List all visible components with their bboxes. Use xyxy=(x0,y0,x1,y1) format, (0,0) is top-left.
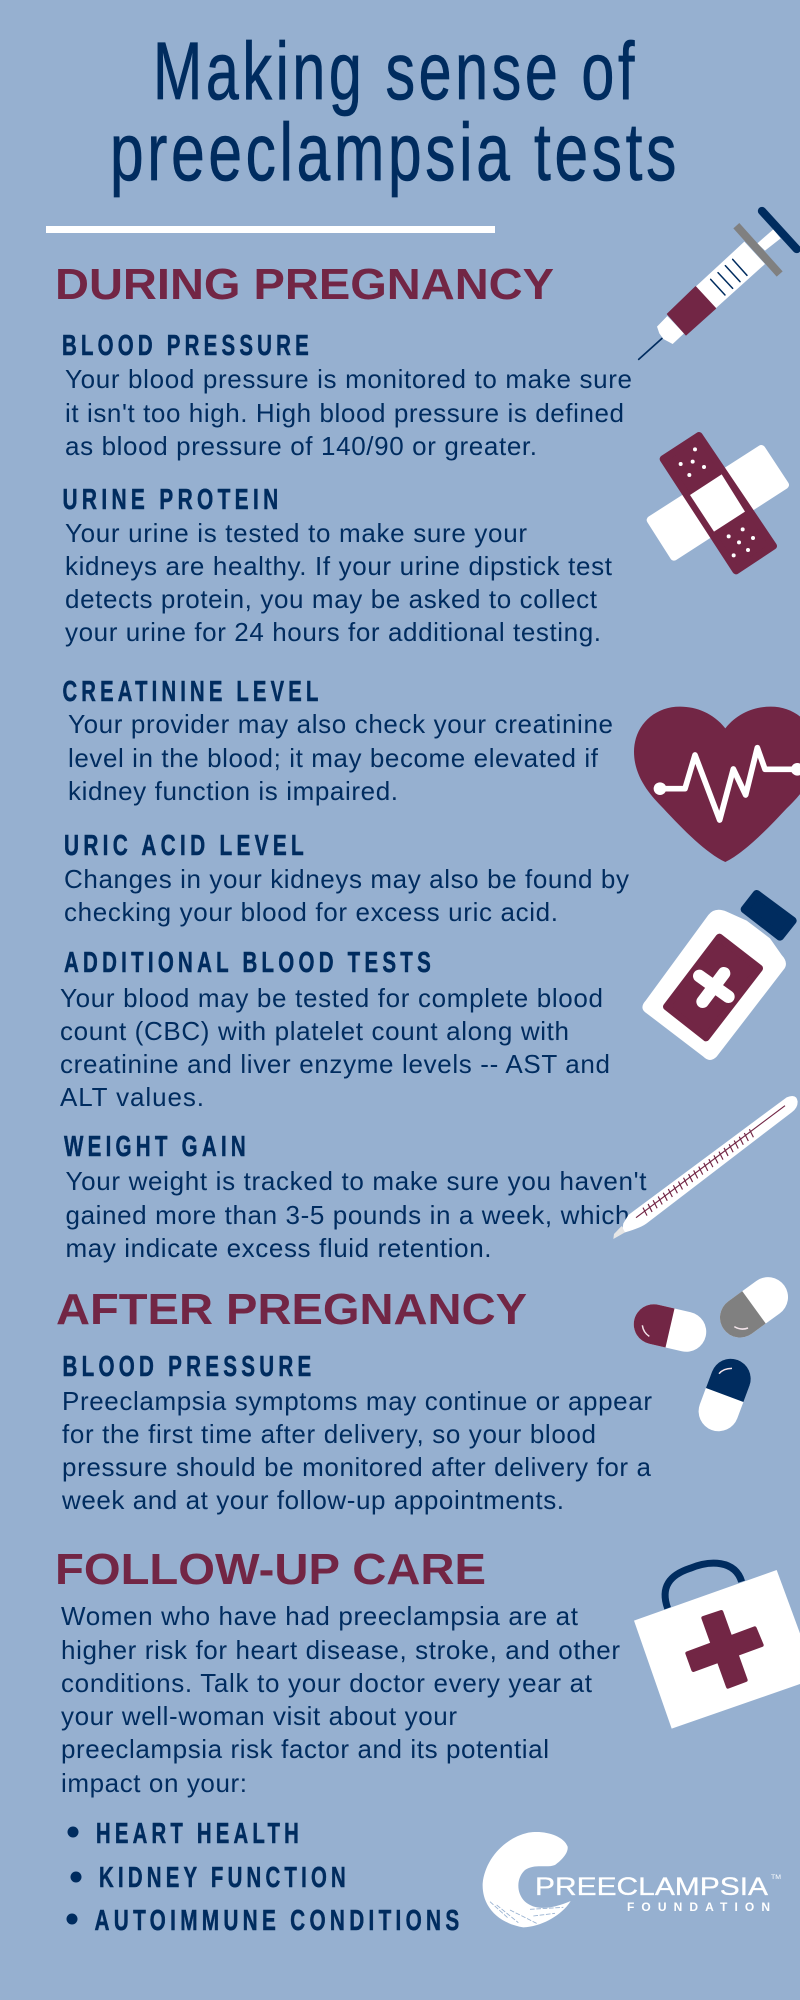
icon: heart with pulse xyxy=(634,707,800,862)
icon: maroon pill xyxy=(630,1300,710,1356)
logo: Preeclampsia Foundation: PREECLAMPSIA xyxy=(535,1873,768,1901)
icon: medicine bottle xyxy=(642,894,793,1060)
logo mark: brush stroke C xyxy=(483,1832,571,1927)
text block: follow-up care: preeclampsia risk factor and its potential xyxy=(61,1734,549,1764)
heading: follow-up care: FOLLOW-UP CARE xyxy=(55,1545,486,1594)
text block: weight gain: gained more than 3-5 pounds in a week, which xyxy=(66,1200,630,1230)
logo: Preeclampsia Foundation: FOUNDATION xyxy=(627,1900,770,1914)
text block: after pregnancy blood pressure: Preeclampsia symptoms may continue or appear xyxy=(62,1386,652,1416)
text block: follow-up care: higher risk for heart disease, stroke, and other xyxy=(61,1635,620,1665)
panel: after pregnancy blood pressure xyxy=(61,1351,652,1515)
text block: weight gain: Your weight is tracked to make sure you haven't xyxy=(66,1166,647,1196)
bullet list xyxy=(66,1818,464,1937)
text block: blood pressure xyxy=(65,364,632,461)
bullet list: KIDNEY FUNCTION xyxy=(99,1862,350,1894)
text block: follow-up care: Women who have had preeclampsia are at xyxy=(61,1601,579,1631)
text block: creatinine level xyxy=(68,709,613,806)
text block: additional blood tests: count (CBC) with platelet count along with xyxy=(60,1016,569,1046)
text block: urine protein: detects protein, you may be asked to collect xyxy=(65,584,598,614)
heading: during pregnancy: DURING PREGNANCY xyxy=(55,260,554,309)
icon: thermometer xyxy=(613,1096,798,1239)
subheading: creatinine level: CREATININE LEVEL xyxy=(62,676,322,708)
logo: Preeclampsia Foundation xyxy=(483,1832,781,1927)
text block: uric acid level: Changes in your kidneys may also be found by xyxy=(64,864,629,894)
text block: blood pressure: Your blood pressure is monitored to make sure xyxy=(65,364,632,394)
subheading: urine protein: URINE PROTEIN xyxy=(62,484,282,516)
title xyxy=(110,26,680,198)
subheading: after pregnancy blood pressure: BLOOD PRESSURE xyxy=(62,1351,316,1383)
bullet list: AUTOIMMUNE CONDITIONS xyxy=(94,1905,464,1937)
text block: urine protein: kidneys are healthy. If your urine dipstick test xyxy=(65,551,613,581)
text block: uric acid level xyxy=(64,864,629,927)
text block: urine protein xyxy=(65,518,613,647)
text block: creatinine level: level in the blood; it may become elevated if xyxy=(68,743,599,773)
text block: weight gain xyxy=(66,1166,647,1263)
text block: follow-up care: conditions. Talk to your doctor every year at xyxy=(61,1668,593,1698)
text block: after pregnancy blood pressure: week and at your follow-up appointments. xyxy=(61,1485,564,1515)
icon: gray pill xyxy=(712,1269,796,1345)
subheading: uric acid level: URIC ACID LEVEL xyxy=(64,830,308,862)
panel: uric acid level xyxy=(64,830,629,927)
text block: weight gain: may indicate excess fluid retention. xyxy=(66,1233,492,1263)
icon: medical kit xyxy=(634,1563,800,1729)
text block: urine protein: your urine for 24 hours for additional testing. xyxy=(65,617,601,647)
text block: follow-up care: your well-woman visit about your xyxy=(61,1701,457,1731)
icon: syringe xyxy=(639,211,797,359)
logo: Preeclampsia Foundation: TM xyxy=(771,1875,781,1881)
text block: after pregnancy blood pressure xyxy=(61,1386,652,1515)
panel: additional blood tests xyxy=(60,947,610,1112)
text block: additional blood tests xyxy=(60,983,610,1112)
heading: after pregnancy: AFTER PREGNANCY xyxy=(56,1285,527,1334)
subheading: blood pressure: BLOOD PRESSURE xyxy=(62,330,313,362)
text block: additional blood tests: creatinine and liver enzyme levels -- AST and xyxy=(60,1049,610,1079)
text block: blood pressure: as blood pressure of 140/90 or greater. xyxy=(65,431,537,461)
text block: uric acid level: checking your blood for excess uric acid. xyxy=(64,897,558,927)
icon: navy pill xyxy=(693,1353,756,1437)
text block: after pregnancy blood pressure: pressure should be monitored after delivery for a xyxy=(62,1452,652,1482)
icon: bandage xyxy=(651,436,785,571)
text block: additional blood tests: Your blood may be tested for complete blood xyxy=(60,983,603,1013)
subheading: additional blood tests: ADDITIONAL BLOOD TESTS xyxy=(64,947,435,979)
text block: creatinine level: Your provider may also check your creatinine xyxy=(68,709,613,739)
text block: urine protein: Your urine is tested to make sure your xyxy=(65,518,527,548)
panel: creatinine level xyxy=(62,676,613,806)
text block: additional blood tests: ALT values. xyxy=(60,1082,204,1112)
text block: after pregnancy blood pressure: for the first time after delivery, so your blood xyxy=(62,1419,596,1449)
text block: blood pressure: it isn't too high. High blood pressure is defined xyxy=(65,398,624,428)
text block: follow-up care: impact on your: xyxy=(61,1768,247,1798)
text block: creatinine level: kidney function is impaired. xyxy=(68,776,398,806)
panel: urine protein xyxy=(62,484,613,647)
panel: blood pressure xyxy=(62,330,632,461)
panel: weight gain xyxy=(64,1131,647,1263)
subheading: weight gain: WEIGHT GAIN xyxy=(64,1131,250,1163)
text block: follow-up care xyxy=(61,1601,620,1798)
bullet list: HEART HEALTH xyxy=(96,1818,303,1850)
